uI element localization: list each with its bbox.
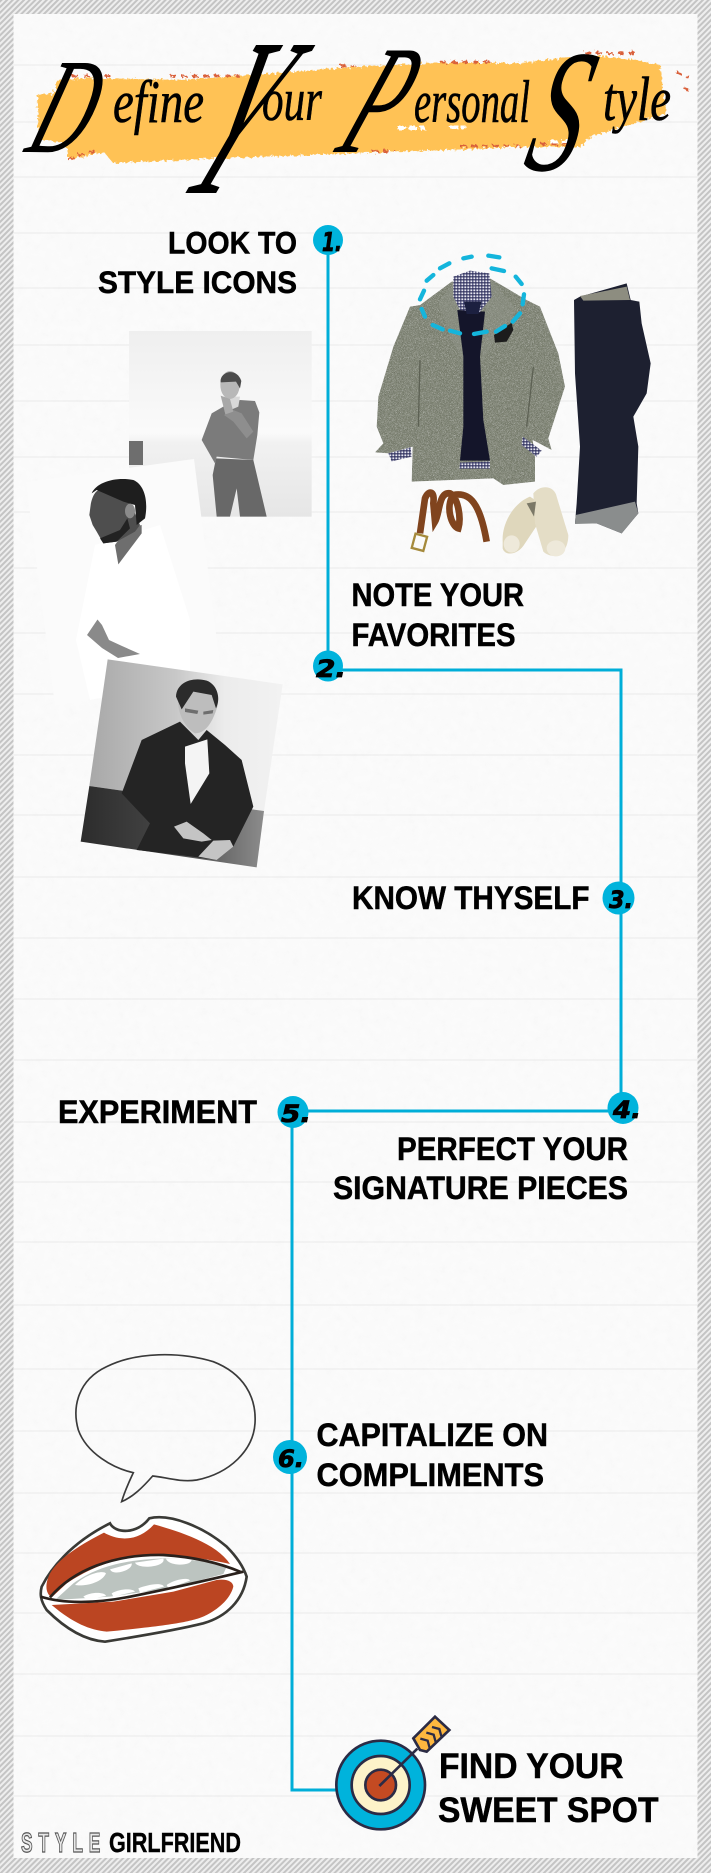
speech bubble bbox=[76, 1355, 255, 1502]
title: S bbox=[512, 15, 612, 208]
step 2 marker: 2. bbox=[316, 655, 346, 683]
step 2 label: FAVORITES bbox=[352, 617, 516, 653]
step 1 label bbox=[98, 224, 297, 300]
sweater bbox=[457, 310, 490, 461]
final step label: FIND YOUR bbox=[439, 1747, 624, 1786]
title: D bbox=[11, 32, 123, 182]
target with arrow bbox=[336, 1717, 449, 1829]
title brush stroke bbox=[37, 53, 692, 163]
step 4 label: SIGNATURE PIECES bbox=[333, 1170, 628, 1206]
gingham shirt bbox=[388, 271, 542, 469]
step 3 label: KNOW THYSELF bbox=[352, 880, 590, 916]
step 1 label: LOOK TO bbox=[168, 224, 297, 260]
step 6 marker bbox=[273, 1440, 307, 1474]
step 2 marker bbox=[313, 650, 346, 683]
title: tyle bbox=[603, 66, 671, 134]
final step label bbox=[438, 1747, 658, 1830]
step 1 label: STYLE ICONS bbox=[98, 264, 297, 300]
step 6 label: COMPLIMENTS bbox=[316, 1457, 544, 1493]
step 4 label bbox=[333, 1131, 628, 1206]
final step label: SWEET SPOT bbox=[438, 1791, 658, 1830]
title: P bbox=[317, 15, 446, 187]
title: efine bbox=[113, 69, 204, 135]
step 6 label bbox=[316, 1417, 548, 1493]
step 6 marker: 6. bbox=[278, 1445, 304, 1473]
title: our bbox=[262, 67, 322, 133]
logo: STYLE bbox=[21, 1827, 100, 1858]
sneakers bbox=[503, 497, 540, 554]
outfit flat lay bbox=[375, 271, 651, 556]
step 1 marker bbox=[313, 225, 343, 258]
step 6 label: CAPITALIZE ON bbox=[316, 1417, 548, 1453]
dashed highlight circle bbox=[420, 256, 524, 334]
flow line bbox=[292, 240, 621, 1790]
blazer bbox=[375, 278, 565, 485]
step 5 label: EXPERIMENT bbox=[58, 1094, 257, 1130]
step 5 marker bbox=[278, 1096, 311, 1128]
step 2 label bbox=[352, 577, 524, 653]
step 4 label: PERFECT YOUR bbox=[397, 1131, 628, 1167]
step 3 marker bbox=[602, 882, 634, 914]
logo: GIRLFRIEND bbox=[109, 1827, 241, 1858]
jeans bbox=[574, 283, 651, 533]
logo bbox=[21, 1827, 241, 1858]
lips bbox=[41, 1517, 247, 1642]
step 1 marker: 1. bbox=[322, 228, 342, 258]
photo: man on the beach bbox=[129, 331, 312, 517]
photo: man in white jacket bbox=[26, 459, 221, 706]
pocket square bbox=[494, 323, 513, 343]
title: ersonal bbox=[414, 69, 530, 135]
step 4 marker bbox=[608, 1092, 641, 1124]
belt bbox=[420, 493, 487, 542]
step 4 marker: 4. bbox=[612, 1096, 641, 1124]
step 3 marker: 3. bbox=[609, 886, 633, 914]
title bbox=[11, 0, 671, 242]
step 5 marker: 5. bbox=[281, 1100, 311, 1128]
step 2 label: NOTE YOUR bbox=[352, 577, 524, 613]
photo: man in dark jacket bbox=[81, 659, 283, 867]
